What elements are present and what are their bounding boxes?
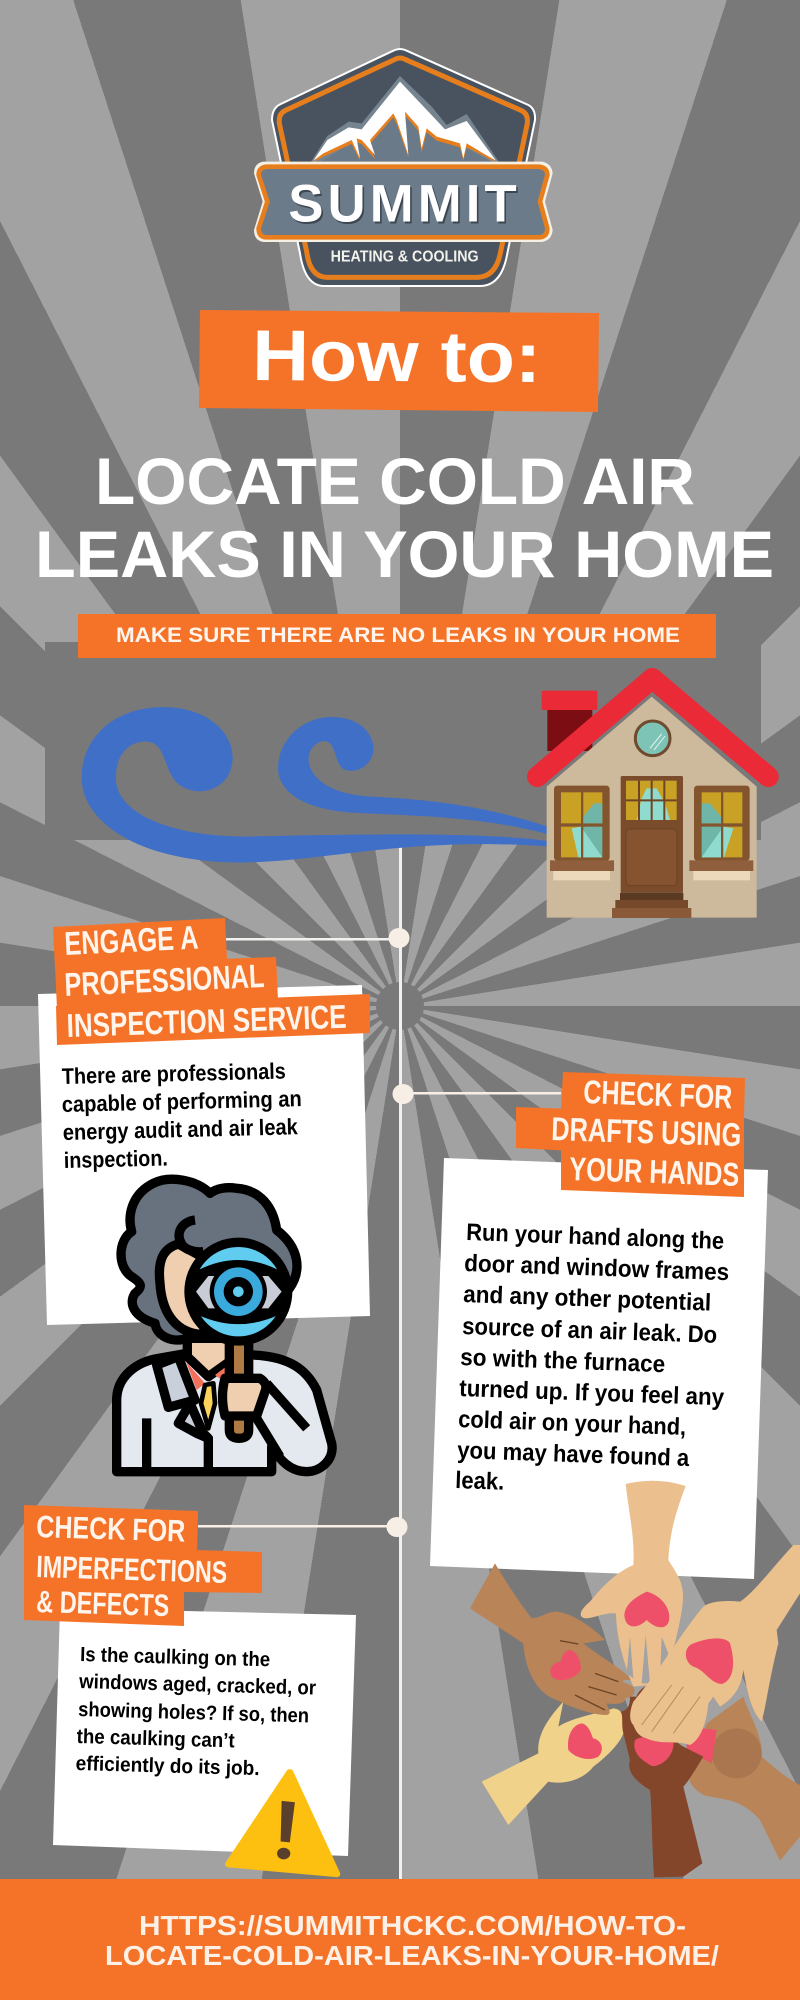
heading: & DEFECTS — [36, 1584, 170, 1623]
footer band — [0, 1879, 800, 2000]
door — [621, 776, 683, 893]
body text: inspection. — [64, 1145, 168, 1173]
body text: capable of performing an — [62, 1086, 302, 1117]
logo shield — [272, 49, 535, 286]
cream hand — [482, 1702, 623, 1825]
left hand heart — [550, 1650, 581, 1680]
subtitle banner: MAKE SURE THERE ARE NO LEAKS IN YOUR HOME — [116, 624, 680, 647]
steps — [612, 893, 691, 918]
logo wordmark: SUMMIT — [288, 175, 517, 234]
heading — [516, 1072, 745, 1197]
body text: Run your hand along the — [466, 1219, 725, 1255]
panel: imperfections and defects — [24, 1505, 356, 1856]
heading: How to — [199, 310, 599, 412]
left hand finger creases — [560, 1641, 618, 1710]
footer band: HTTPS://SUMMITHCKC.COM/HOW-TO- — [139, 1910, 686, 1941]
title: LOCATE COLD AIR — [95, 444, 695, 518]
heading — [53, 918, 370, 1045]
shirt and tie — [157, 1357, 226, 1438]
coat seams — [147, 1383, 307, 1470]
logo wordmark shadow: SUMMIT — [290, 176, 518, 235]
large light hand — [630, 1545, 800, 1745]
body text: you may have found a — [457, 1437, 690, 1472]
house body — [547, 697, 757, 918]
heading: CHECK FOR — [583, 1073, 733, 1115]
body text — [455, 1219, 730, 1496]
body text: the caulking can’t — [76, 1725, 235, 1752]
left brown hand — [470, 1563, 635, 1715]
heading: PROFESSIONAL — [64, 957, 265, 1003]
body text: efficiently do its job. — [75, 1752, 260, 1780]
heading: ENGAGE A — [64, 918, 199, 962]
logo banner — [254, 162, 553, 242]
round attic window — [635, 721, 670, 756]
subtitle banner — [78, 614, 716, 658]
panel: engage a professional — [38, 918, 370, 1325]
body text: energy audit and air leak — [63, 1114, 298, 1145]
centre heart — [634, 1736, 673, 1766]
tan hand palm shading — [712, 1728, 762, 1778]
top peach hand — [581, 1481, 686, 1687]
body text: and any other potential — [463, 1281, 712, 1317]
icon: scientist with magnifying glass — [117, 1179, 332, 1472]
dark house-shaped background block — [45, 642, 761, 840]
cream hand heart — [568, 1723, 602, 1759]
hair curl — [179, 1220, 210, 1252]
body text — [62, 1059, 302, 1173]
chimney — [542, 691, 597, 751]
logo: Summit Heating & Cooling — [254, 49, 553, 286]
icon: house — [537, 678, 768, 918]
heading: YOUR HANDS — [569, 1150, 740, 1193]
body text: turned up. If you feel any — [459, 1375, 725, 1411]
timeline — [198, 845, 561, 1879]
top hand finger gaps — [627, 1635, 668, 1683]
heading: INSPECTION SERVICE — [66, 998, 347, 1044]
lower right tan hand — [689, 1697, 800, 1861]
large hand finger creases — [642, 1685, 700, 1733]
heading — [24, 1505, 262, 1626]
card — [53, 1608, 356, 1856]
panel: check for drafts — [430, 1072, 768, 1579]
body text: leak. — [455, 1467, 505, 1496]
body text: windows aged, cracked, or — [78, 1670, 316, 1700]
title: LEAKS IN YOUR HOME — [35, 517, 774, 591]
face — [159, 1244, 227, 1334]
magnifier handle — [229, 1340, 249, 1438]
body text: cold air on your hand, — [458, 1406, 687, 1441]
title — [35, 444, 774, 591]
heading: IMPERFECTIONS — [36, 1549, 228, 1590]
heading: DRAFTS USING — [551, 1110, 742, 1153]
card — [38, 985, 370, 1325]
body text: Is the caulking on the — [80, 1643, 270, 1671]
footer band: LOCATE-COLD-AIR-LEAKS-IN-YOUR-HOME/ — [105, 1940, 719, 1971]
icon: warning triangle — [229, 1772, 337, 1874]
card — [430, 1158, 768, 1579]
lab coat — [117, 1354, 332, 1472]
body text: so with the furnace — [460, 1344, 666, 1378]
hair — [121, 1179, 297, 1340]
magnifier lens — [189, 1242, 288, 1341]
hand — [222, 1378, 266, 1416]
logo mountain — [310, 76, 500, 163]
body text: showing holes? If so, then — [78, 1698, 309, 1727]
heading: CHECK FOR — [36, 1509, 186, 1549]
body text: There are professionals — [62, 1059, 286, 1089]
body text: door and window frames — [464, 1250, 730, 1286]
body text — [75, 1643, 316, 1780]
sunburst centre circle — [376, 982, 424, 1030]
body text: source of an air leak. Do — [462, 1313, 718, 1349]
icon: hands holding hearts — [470, 1481, 800, 1877]
logo tagline: HEATING & COOLING — [331, 249, 479, 266]
right window — [689, 786, 753, 880]
heading: How to: How to: — [252, 316, 541, 398]
roof — [537, 678, 768, 777]
hidden hearts — [687, 1727, 717, 1763]
large hand heart — [686, 1638, 733, 1684]
hair curl outline — [179, 1220, 203, 1252]
top hand heart — [624, 1592, 669, 1627]
neck — [187, 1338, 232, 1377]
left window — [550, 786, 614, 880]
icon: blue wind — [82, 707, 548, 863]
dark brown hand — [618, 1686, 703, 1877]
